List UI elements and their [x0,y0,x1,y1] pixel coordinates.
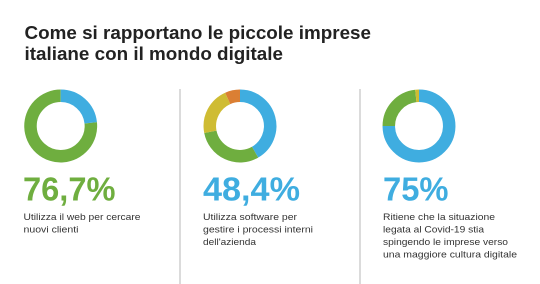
description: software: gestire i processi interni [203,224,313,234]
description: Covid-19: una maggiore cultura digitale [383,248,517,260]
donut chart: 76,7% [30,96,91,156]
title: Come si rapportano le piccole imprese [24,23,371,43]
panel: web per nuovi clienti [23,96,140,234]
description: Covid-19: legata al Covid-19 stia [383,224,485,234]
title: italiane con il mondo digitale [24,44,283,64]
description: web [24,211,140,234]
description: Covid-19: spingendo le imprese verso [383,236,508,247]
description: web: nuovi clienti [24,224,78,234]
title [24,23,371,64]
statistic: 76,7%: 76,7% [23,171,116,208]
statistic: 48,4%: 48,4% [203,171,300,208]
description: software: Utilizza software per [203,211,297,222]
description: software: dell'azienda [203,236,257,247]
donut chart: 75% [389,96,449,156]
panel: software gestionale [203,96,313,247]
description: Covid-19 [383,211,517,260]
description: software [203,211,313,247]
panel: cultura digitale [383,96,517,260]
donut chart: 48,4% [210,96,270,156]
description: web: Utilizza il web per cercare [24,211,140,222]
description: Covid-19: Ritiene che la situazione [383,211,495,222]
statistic: 75%: 75% [383,171,448,208]
